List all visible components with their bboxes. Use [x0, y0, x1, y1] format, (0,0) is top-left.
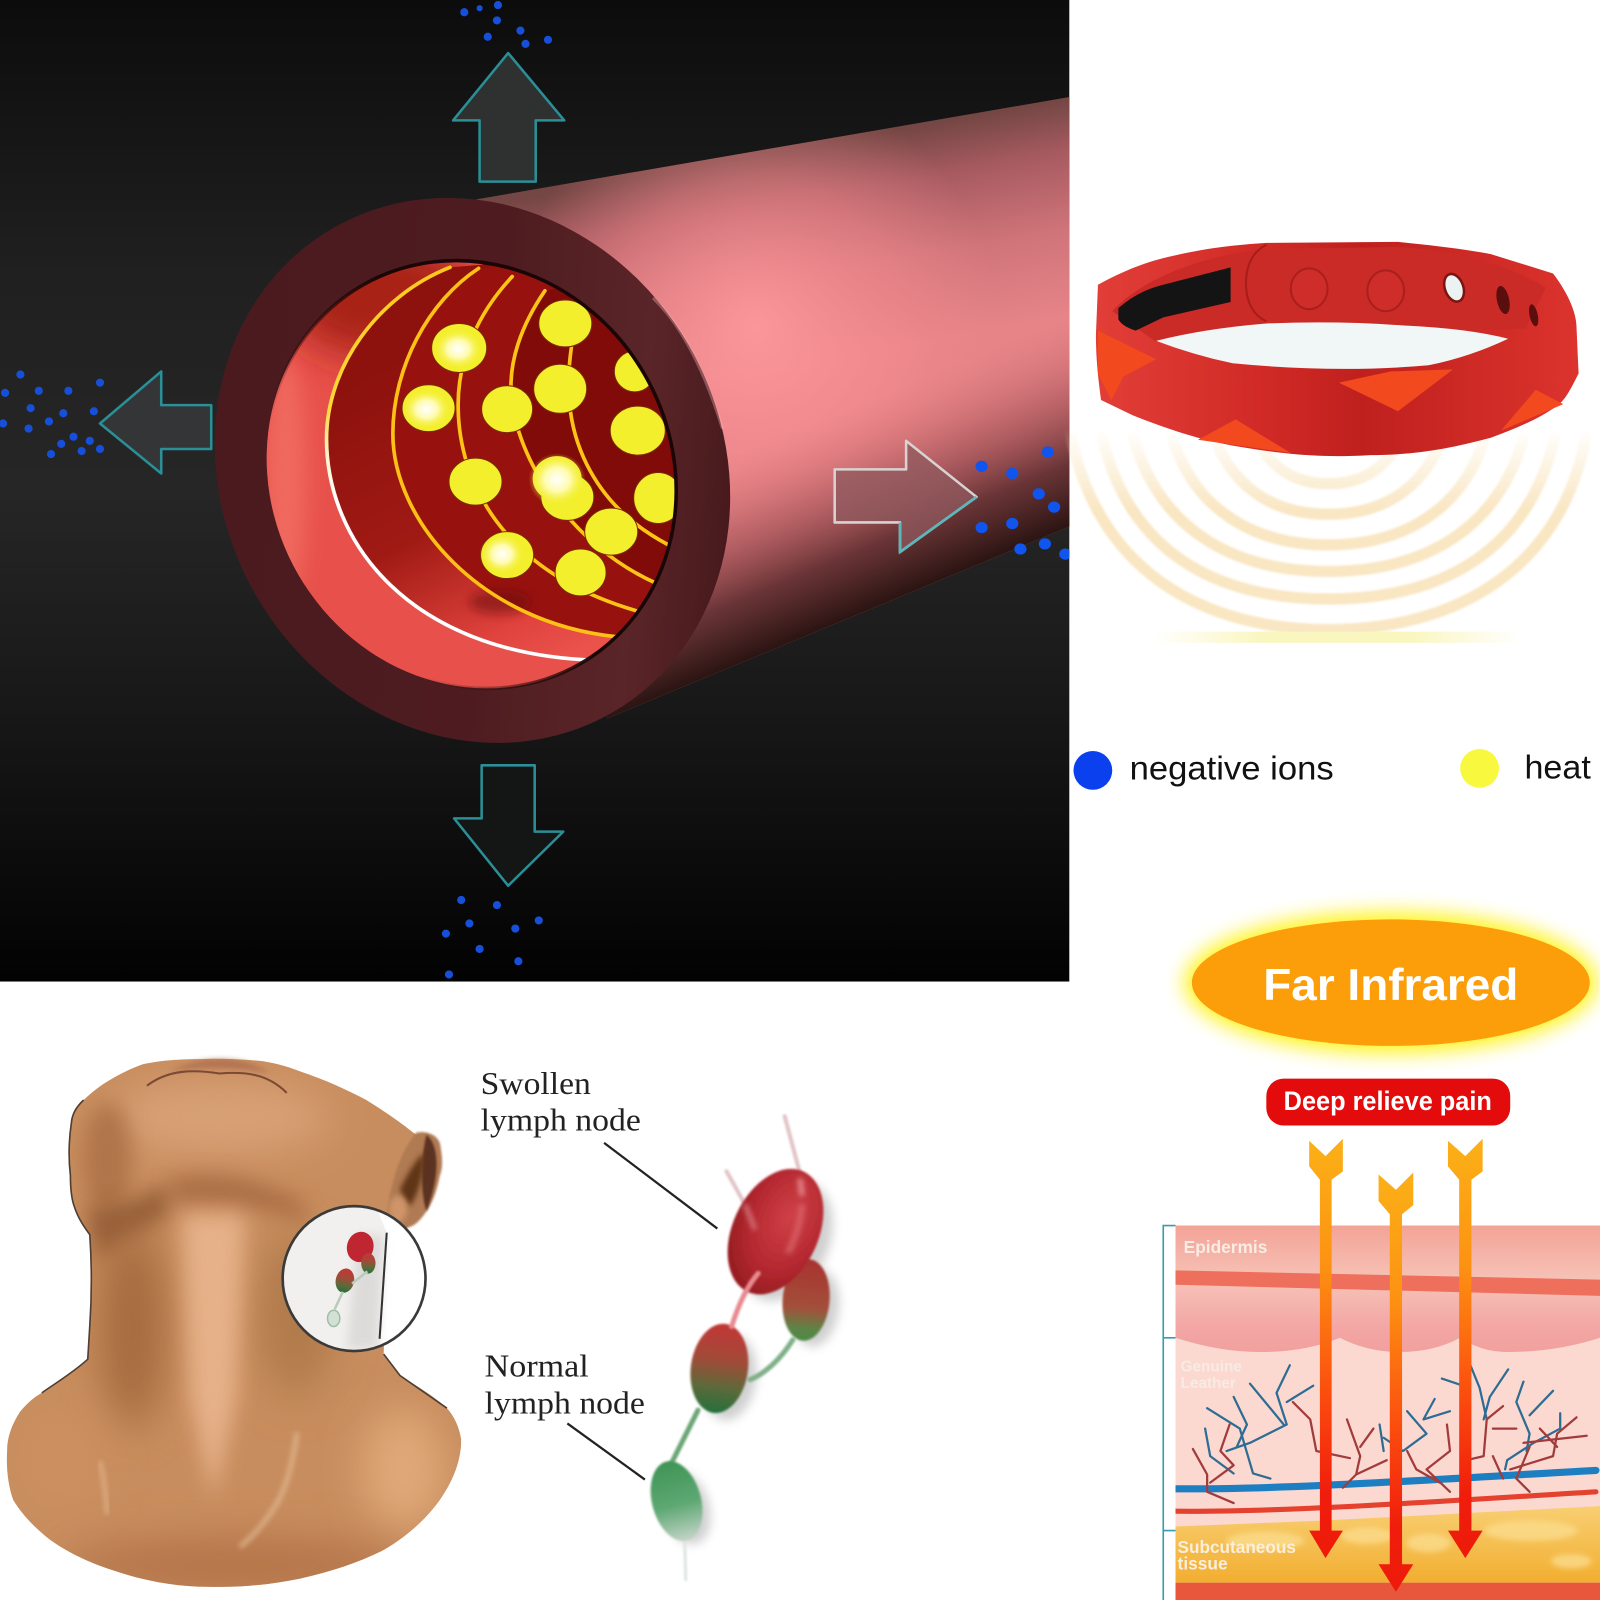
node: normal	[642, 1455, 711, 1547]
arrow: far infrared ray 2	[1379, 1172, 1413, 1592]
vessel wall ring	[214, 198, 730, 743]
strap buttons	[1291, 268, 1404, 311]
nodes	[642, 1153, 842, 1547]
vessel inner edge	[273, 258, 678, 690]
inset node: swollen	[346, 1232, 374, 1262]
connectors	[671, 1116, 800, 1580]
ear	[387, 1132, 442, 1228]
label: genuine leather: Leather	[1181, 1375, 1236, 1392]
epidermis layer	[1176, 1226, 1600, 1280]
deep relieve pain label	[1266, 1079, 1510, 1126]
label: subcutaneous tissue: tissue	[1178, 1553, 1228, 1573]
pointer: normal	[567, 1423, 645, 1480]
heat glow strip	[1153, 632, 1520, 643]
strap tab	[1246, 245, 1266, 321]
lymph node chain	[642, 1116, 851, 1580]
legend: heat: heat	[1524, 750, 1591, 787]
node highlights	[745, 1179, 802, 1253]
panel: far infrared skin penetration	[1163, 912, 1600, 1600]
negative ion dots: left	[0, 370, 104, 458]
fat layer	[1176, 1506, 1600, 1583]
ring rim highlight	[653, 298, 722, 429]
wristband centre opening	[1156, 322, 1508, 369]
node: swollen	[709, 1153, 842, 1310]
label: swollen lymph node: lymph node	[481, 1103, 641, 1138]
papillary layer	[1176, 1284, 1600, 1352]
lips	[147, 1059, 287, 1093]
wristband body	[1096, 242, 1579, 456]
white highlights on particles	[402, 329, 586, 574]
wristband back inner strap	[1112, 247, 1546, 342]
orange diamond panels	[1098, 331, 1563, 453]
negative ion dots: right	[976, 446, 1071, 560]
legend: heat	[1460, 749, 1591, 788]
neck illustration	[0, 1051, 469, 1597]
heat wave arcs	[1069, 427, 1588, 630]
node: side	[779, 1257, 833, 1343]
far infrared badge	[1185, 912, 1597, 1053]
arrow: up	[453, 53, 564, 182]
node shadows	[656, 1165, 851, 1549]
black ion strip	[1118, 267, 1231, 331]
vessel lumen interior	[266, 262, 674, 688]
strap holes	[1441, 271, 1540, 327]
negative ion dots: bottom	[442, 896, 543, 979]
label: normal lymph node: Normal	[485, 1349, 589, 1384]
blood vessel tube body	[476, 97, 1070, 718]
label: epidermis: Epidermis	[1184, 1237, 1267, 1257]
arrow: down	[454, 765, 563, 886]
label: genuine leather: Genuine	[1181, 1358, 1242, 1375]
far infrared badge: Far Infrared	[1263, 959, 1518, 1010]
pointer: swollen	[604, 1143, 717, 1229]
arrow: far infrared ray 3	[1448, 1139, 1483, 1558]
negative ion dots: top	[460, 1, 552, 48]
neck outline	[42, 1100, 447, 1408]
magnifier inset	[283, 1206, 426, 1352]
dermis layer	[1176, 1338, 1600, 1531]
heat channel lines	[327, 267, 668, 660]
label: normal lymph node: lymph node	[485, 1385, 645, 1420]
panel: blood vessel on dark background	[0, 0, 1092, 982]
capillaries: blue	[1205, 1365, 1560, 1479]
arrow: left	[100, 371, 211, 473]
layer bracket	[1163, 1226, 1176, 1600]
label: swollen lymph node: Swollen	[481, 1066, 591, 1101]
arrow: far infrared ray 1	[1309, 1139, 1343, 1558]
capillaries: red	[1193, 1402, 1587, 1503]
panel: neck with lymph nodes	[0, 1051, 851, 1597]
red artery	[1176, 1492, 1596, 1511]
node: middle	[685, 1320, 754, 1417]
label: subcutaneous tissue: Subcutaneous	[1178, 1537, 1296, 1557]
arrow: right	[835, 441, 977, 552]
muscle layer	[1176, 1583, 1600, 1600]
panel: wristband with heat waves	[1069, 242, 1588, 643]
blue vein	[1176, 1470, 1596, 1489]
legend: negative ions: negative ions	[1130, 751, 1334, 788]
yellow heat particles	[402, 300, 683, 596]
deep relieve pain label: Deep relieve pain	[1284, 1086, 1492, 1116]
connector: swollen to middle	[732, 1273, 758, 1327]
skin cross section	[1176, 1226, 1600, 1600]
